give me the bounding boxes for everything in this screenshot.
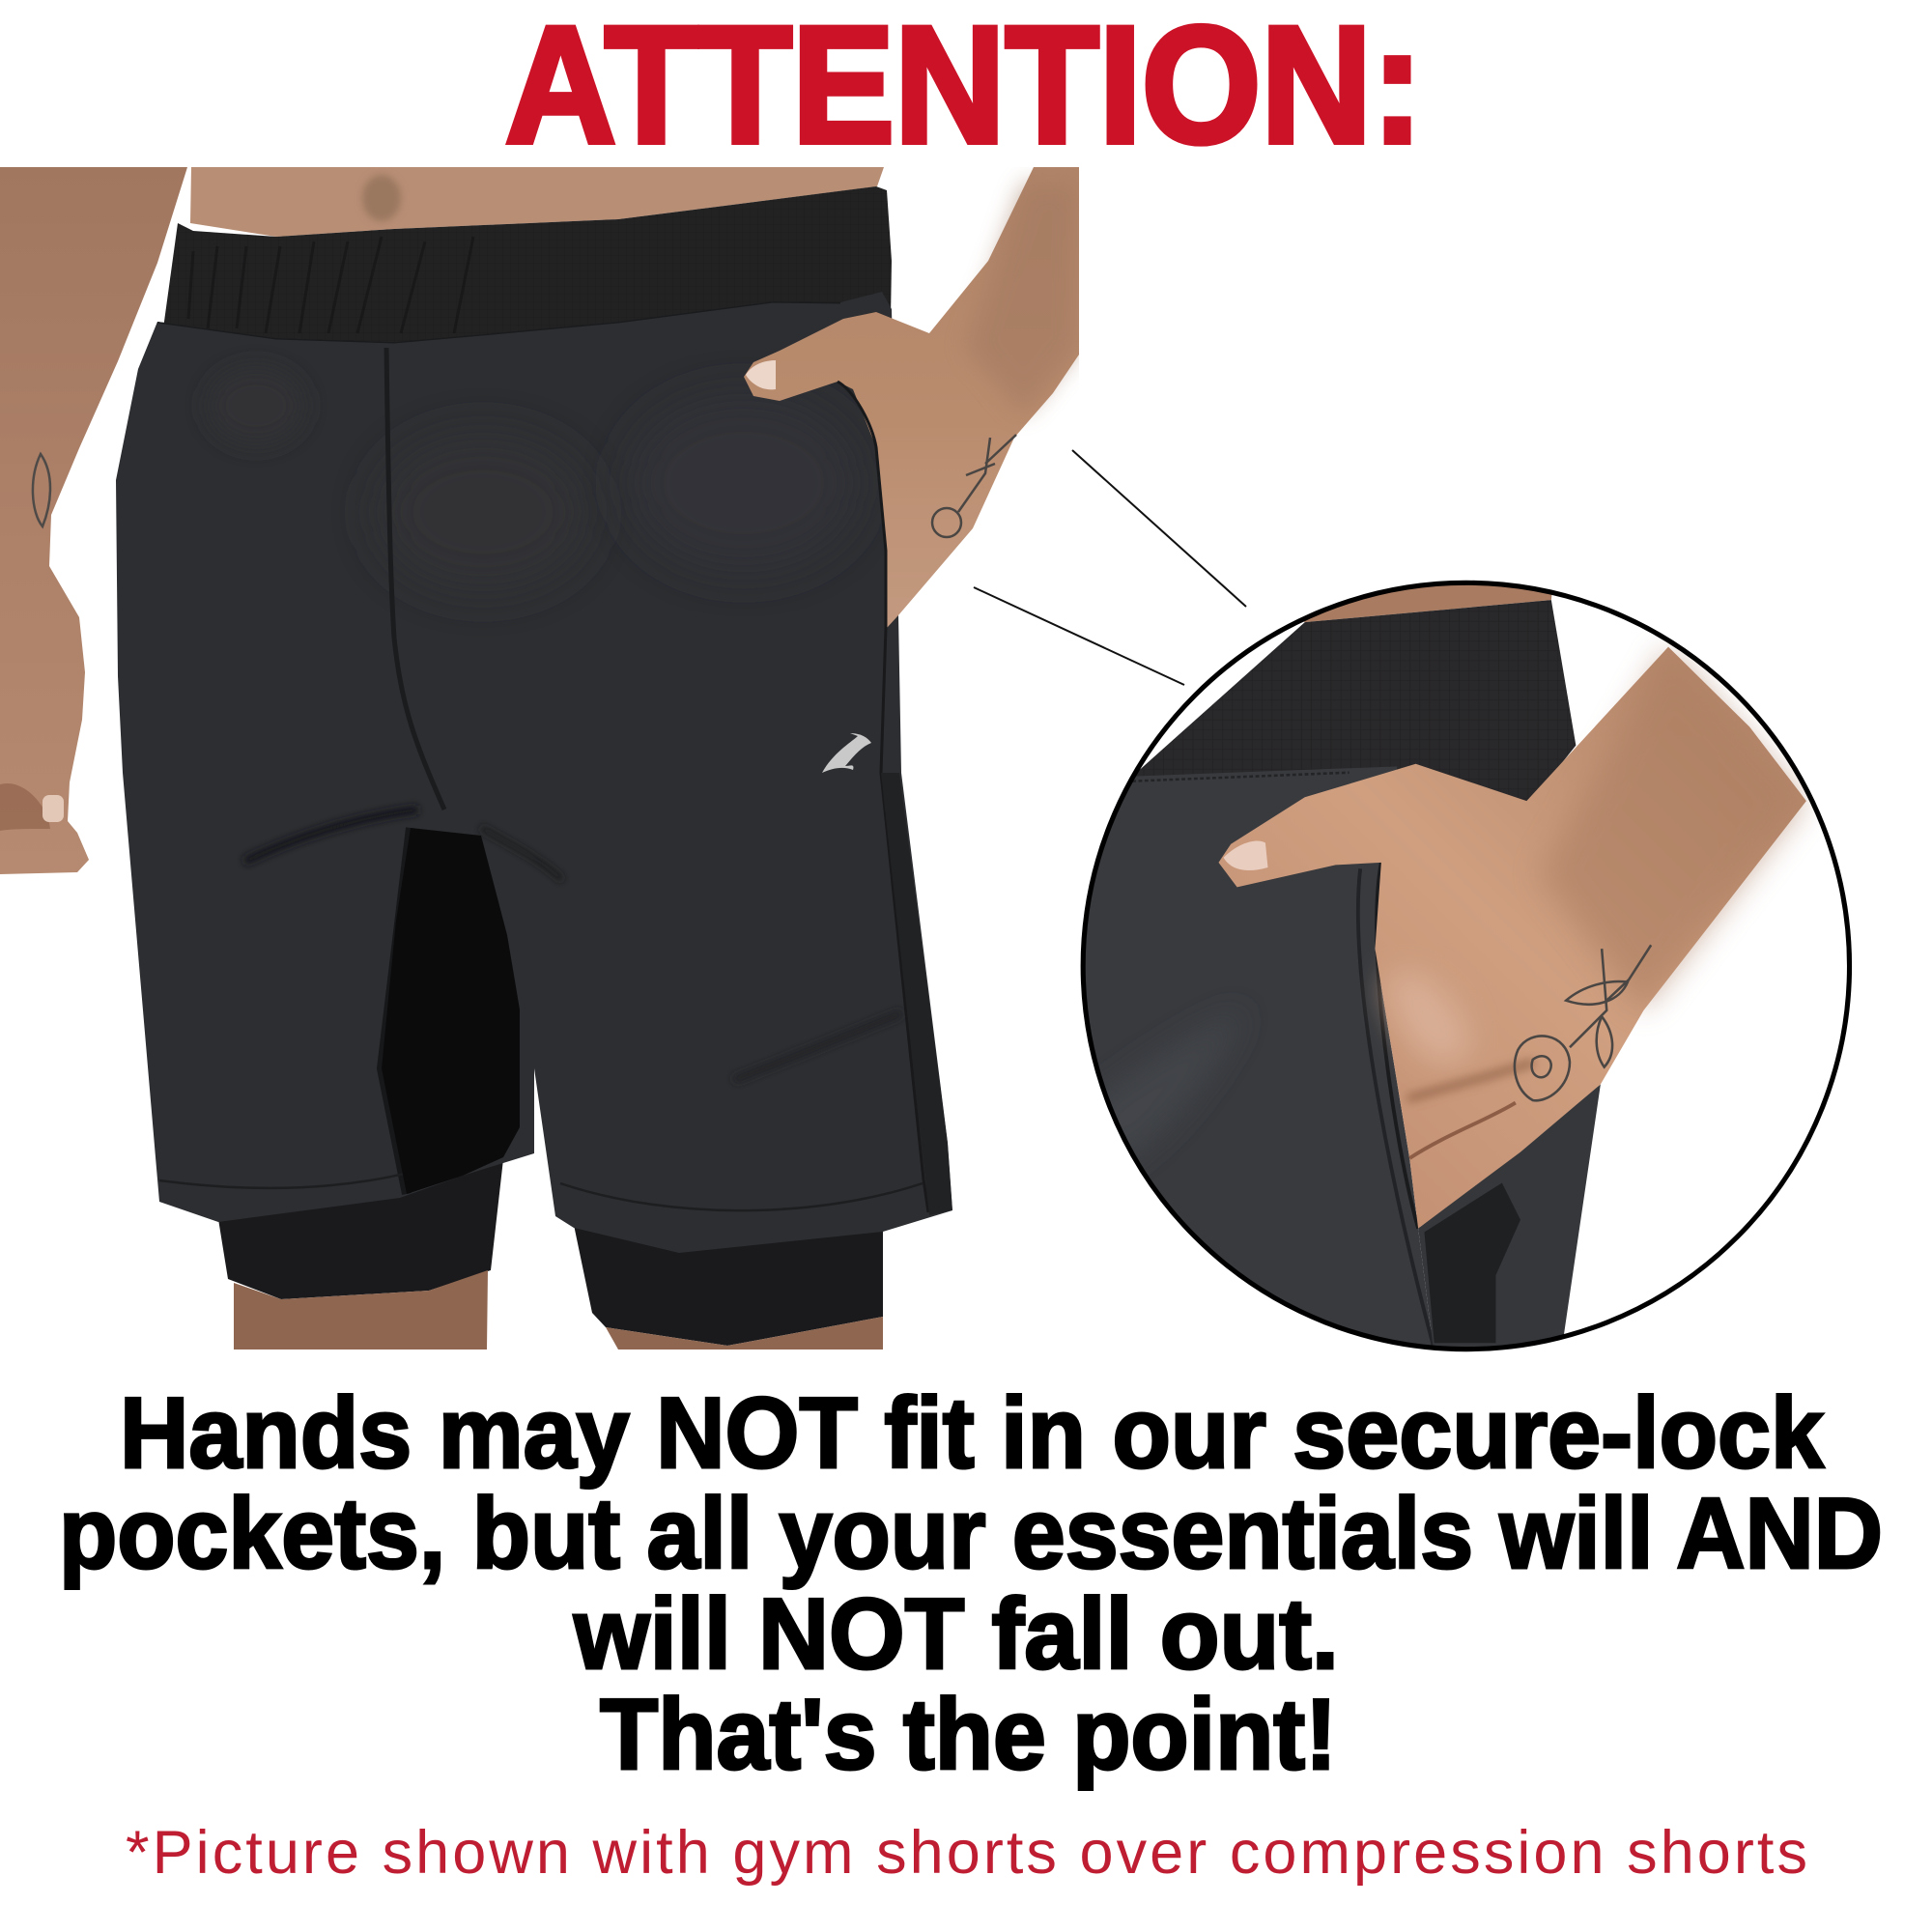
ribbed waistband xyxy=(1136,600,1577,802)
main message text xyxy=(59,1378,1883,1791)
mesh side panel xyxy=(1424,1182,1520,1343)
hand tattoo xyxy=(932,435,1016,537)
right forearm and hand in pocket xyxy=(744,167,1079,628)
skin strip above waistband xyxy=(1304,585,1551,622)
compression shorts left leg xyxy=(218,1159,503,1299)
panel: circular pocket close-up xyxy=(1060,567,1850,1355)
callout line upper xyxy=(1072,450,1246,607)
brand logo xyxy=(822,733,871,773)
black mesh lining between legs xyxy=(382,828,520,1194)
gym shorts body xyxy=(116,292,952,1253)
footnote: *Picture shown with gym shorts over compression shorts xyxy=(126,1819,1807,1887)
line 3: will NOT fall out. xyxy=(573,1578,1339,1690)
callout line lower xyxy=(974,587,1184,685)
right thigh xyxy=(606,1317,883,1350)
left arm and hand xyxy=(0,167,187,874)
thumb nail xyxy=(1224,841,1267,870)
shorts fabric right of pocket xyxy=(1418,1084,1601,1355)
circle outline xyxy=(1083,582,1850,1350)
torso skin xyxy=(190,167,884,237)
shorts fabric left of pocket xyxy=(1060,766,1435,1355)
compression shorts right leg xyxy=(574,1225,883,1346)
waistband xyxy=(163,186,892,353)
line 4: That's the point! xyxy=(600,1679,1337,1791)
hand and forearm xyxy=(1218,647,1806,1229)
left thigh xyxy=(234,1270,488,1350)
panel: product photo of shorts on model xyxy=(0,167,1079,1350)
rose tattoo xyxy=(1515,945,1651,1100)
line 1: Hands may NOT fit in our secure-lock xyxy=(120,1378,1824,1490)
line 2: pockets, but all your essentials will AND xyxy=(59,1478,1883,1590)
